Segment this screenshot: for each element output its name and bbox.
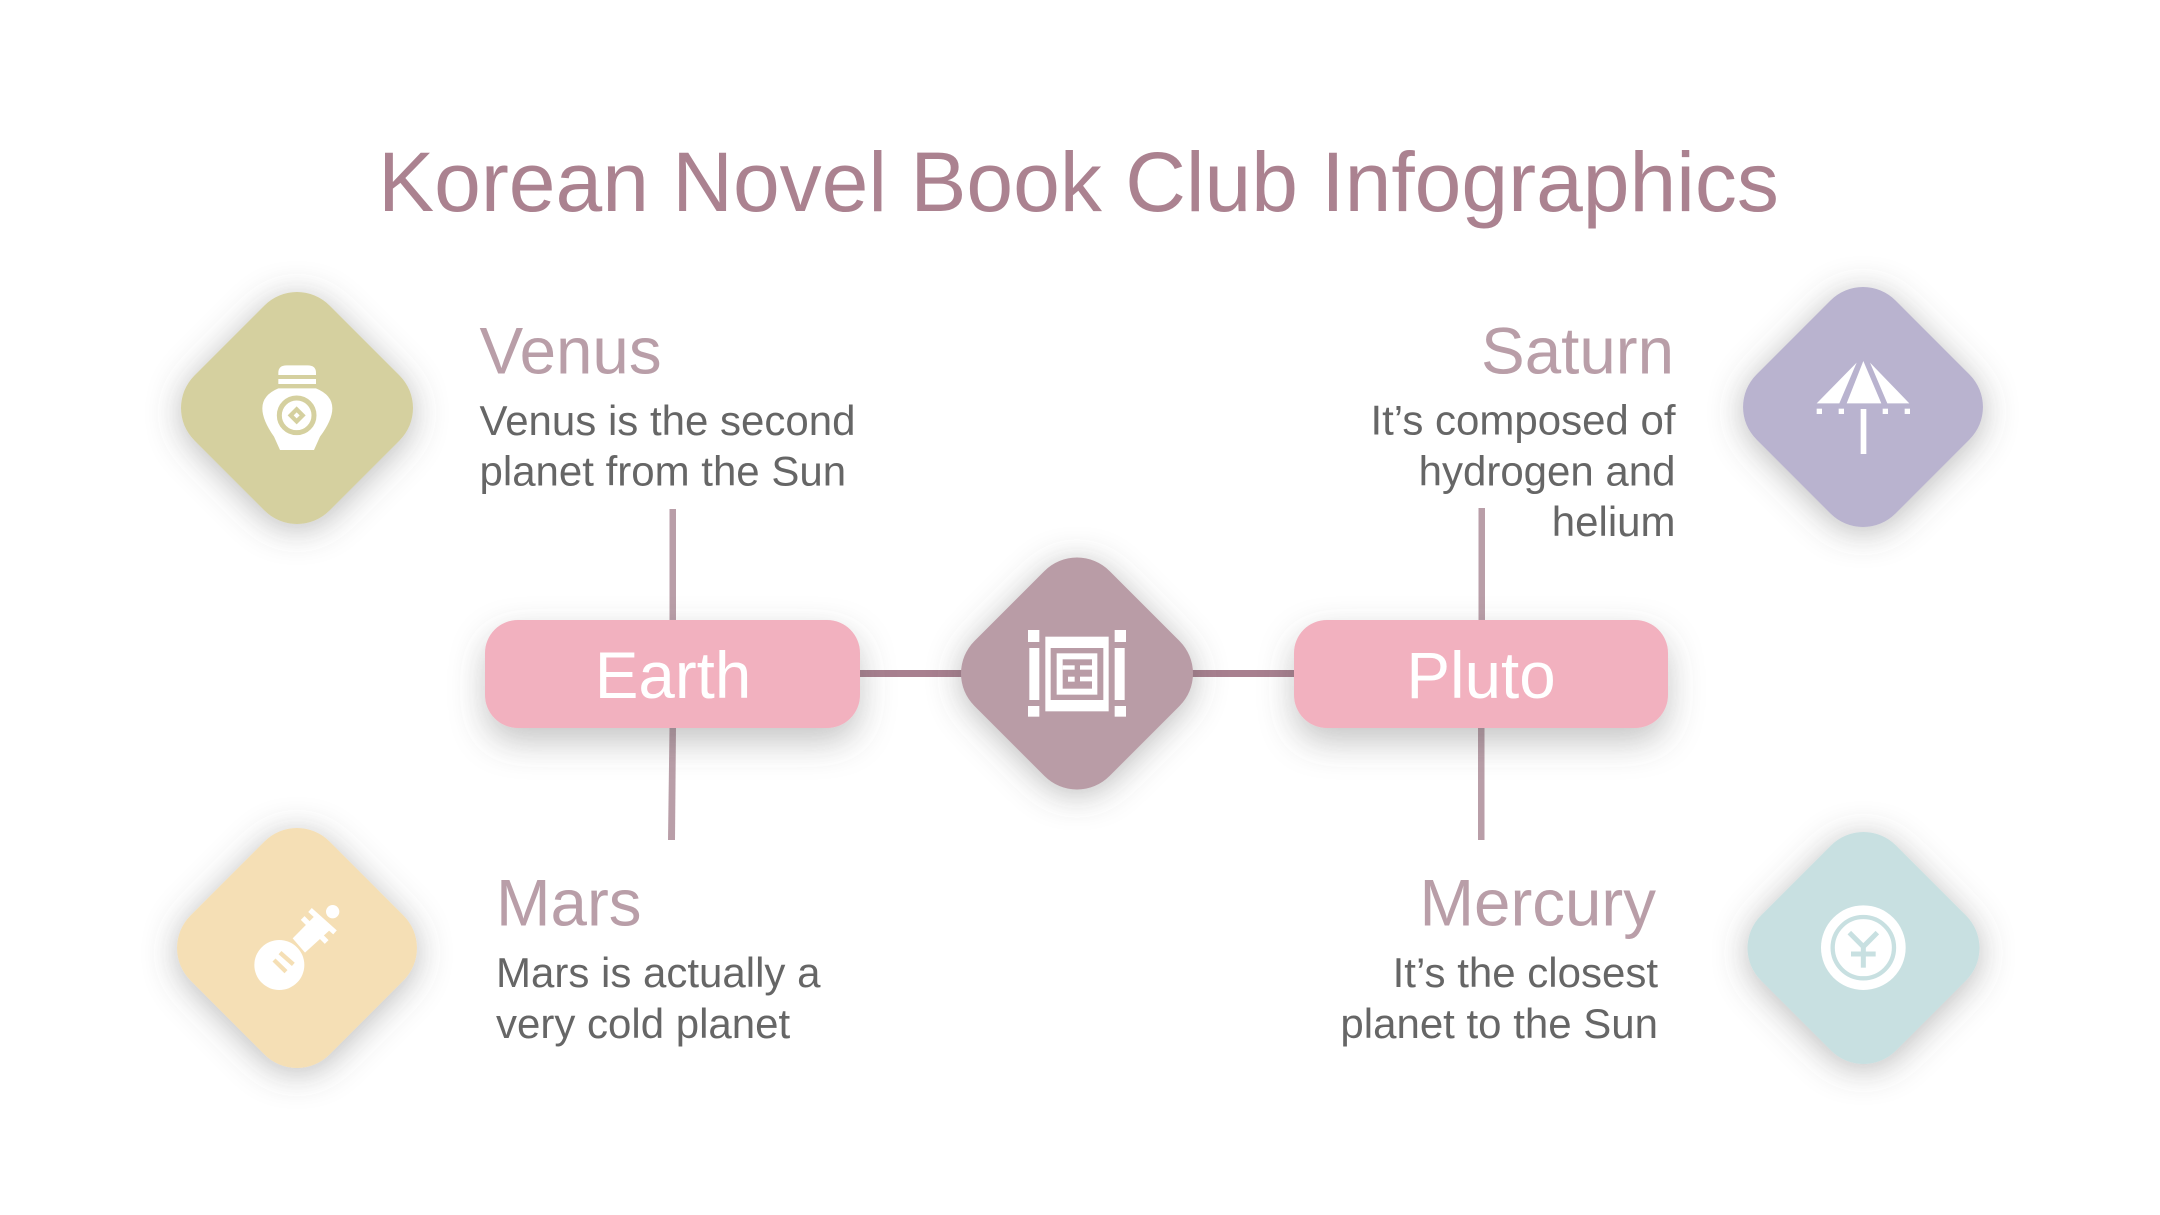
connector: Earth to Mars <box>668 727 676 840</box>
icon: jar <box>262 365 332 450</box>
text block: Mars <box>496 866 821 1047</box>
text block: Venus: planet from the Sun <box>480 448 846 494</box>
title: Korean Novel Book Club Infographics <box>378 135 1779 229</box>
text block: Mercury <box>1340 866 1658 1047</box>
connector: Pluto to Mercury <box>1478 727 1484 840</box>
text block: Mars: Mars is actually a <box>496 949 821 996</box>
icon: instrument <box>254 905 339 990</box>
centre diamond <box>942 538 1212 809</box>
text block: Saturn: hydrogen and <box>1419 448 1676 494</box>
icon: scroll <box>1028 630 1126 717</box>
connector: Saturn to Pluto <box>1478 508 1485 621</box>
diamond: Saturn umbrella <box>1724 268 2002 546</box>
connector: Earth to centre <box>860 670 964 677</box>
diamond: Mercury coin <box>1728 813 1999 1083</box>
icon: umbrella <box>1817 361 1910 454</box>
text block: Saturn <box>1370 314 1676 545</box>
diamond: Mars instrument <box>158 809 436 1087</box>
text block: Venus: Venus <box>480 314 662 388</box>
text block: Mars: Mars <box>496 866 642 940</box>
text block: Saturn: Saturn <box>1481 314 1674 388</box>
text block: Venus: Venus is the second <box>480 397 855 444</box>
pill: Earth <box>485 620 860 728</box>
text block: Saturn: helium <box>1552 498 1676 545</box>
pill: Pluto <box>1294 620 1668 728</box>
text block: Saturn: It’s composed of <box>1370 396 1676 444</box>
connector: centre to Pluto <box>1190 670 1294 677</box>
connector: Venus to Earth <box>670 509 676 621</box>
text block: Mars: very cold planet <box>496 1000 790 1047</box>
pill: Earth: Earth <box>595 639 751 712</box>
diamond: Venus jar <box>162 273 432 543</box>
icon: coin <box>1821 905 1906 990</box>
text block: Venus <box>480 314 855 494</box>
text block: Mercury: Mercury <box>1419 866 1656 940</box>
pill: Pluto: Pluto <box>1406 639 1556 712</box>
text block: Mercury: planet to the Sun <box>1340 1000 1658 1047</box>
text block: Mercury: It’s the closest <box>1393 949 1658 996</box>
